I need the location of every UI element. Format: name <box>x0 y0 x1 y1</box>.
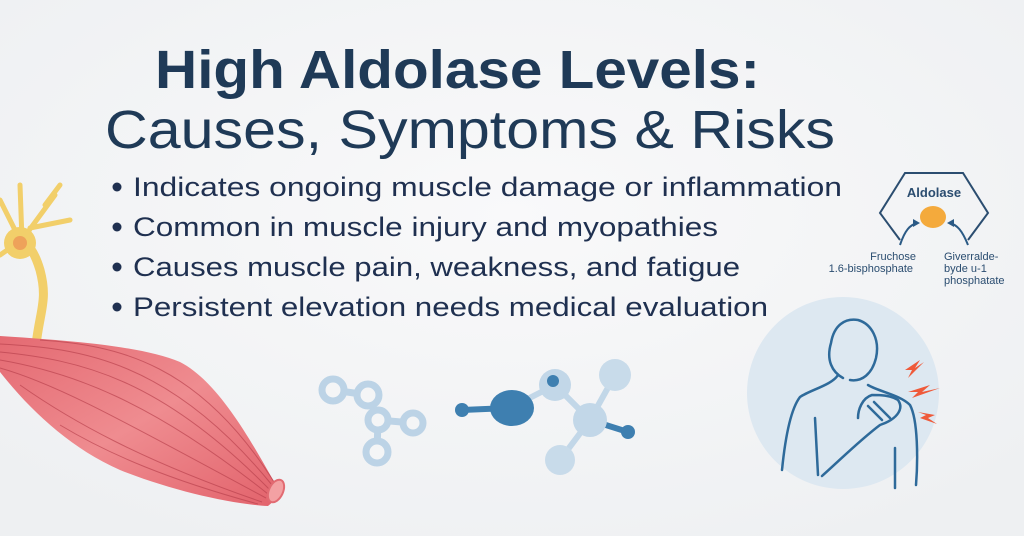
diagram: aldolase reaction: byde u-1 <box>944 263 987 275</box>
title: Causes, Symptoms & Risks <box>105 100 835 160</box>
diagram: aldolase reaction: Fruchose <box>870 251 916 263</box>
title <box>105 40 835 160</box>
icon: neuron <box>0 185 70 345</box>
title: High Aldolase Levels: <box>155 40 760 100</box>
icon: molecule left <box>322 379 423 463</box>
bullet list: Indicates ongoing muscle damage or inflammation <box>133 172 842 202</box>
bullet list <box>112 172 842 322</box>
diagram: aldolase reaction: Giverralde- <box>944 251 999 263</box>
diagram: aldolase reaction: phosphatate <box>944 275 1005 287</box>
diagram: aldolase reaction <box>829 173 1005 287</box>
diagram: aldolase reaction: Aldolase <box>907 185 961 200</box>
bullet list: Common in muscle injury and myopathies <box>133 212 718 242</box>
icon: person with shoulder pain <box>747 297 940 489</box>
icon: muscle <box>0 336 287 506</box>
diagram: aldolase reaction: 1.6-bisphosphate <box>829 263 913 275</box>
bullet list: Persistent elevation needs medical evaluation <box>133 292 768 322</box>
icon: molecule right <box>455 359 635 475</box>
bullet list: Causes muscle pain, weakness, and fatigue <box>133 252 740 282</box>
